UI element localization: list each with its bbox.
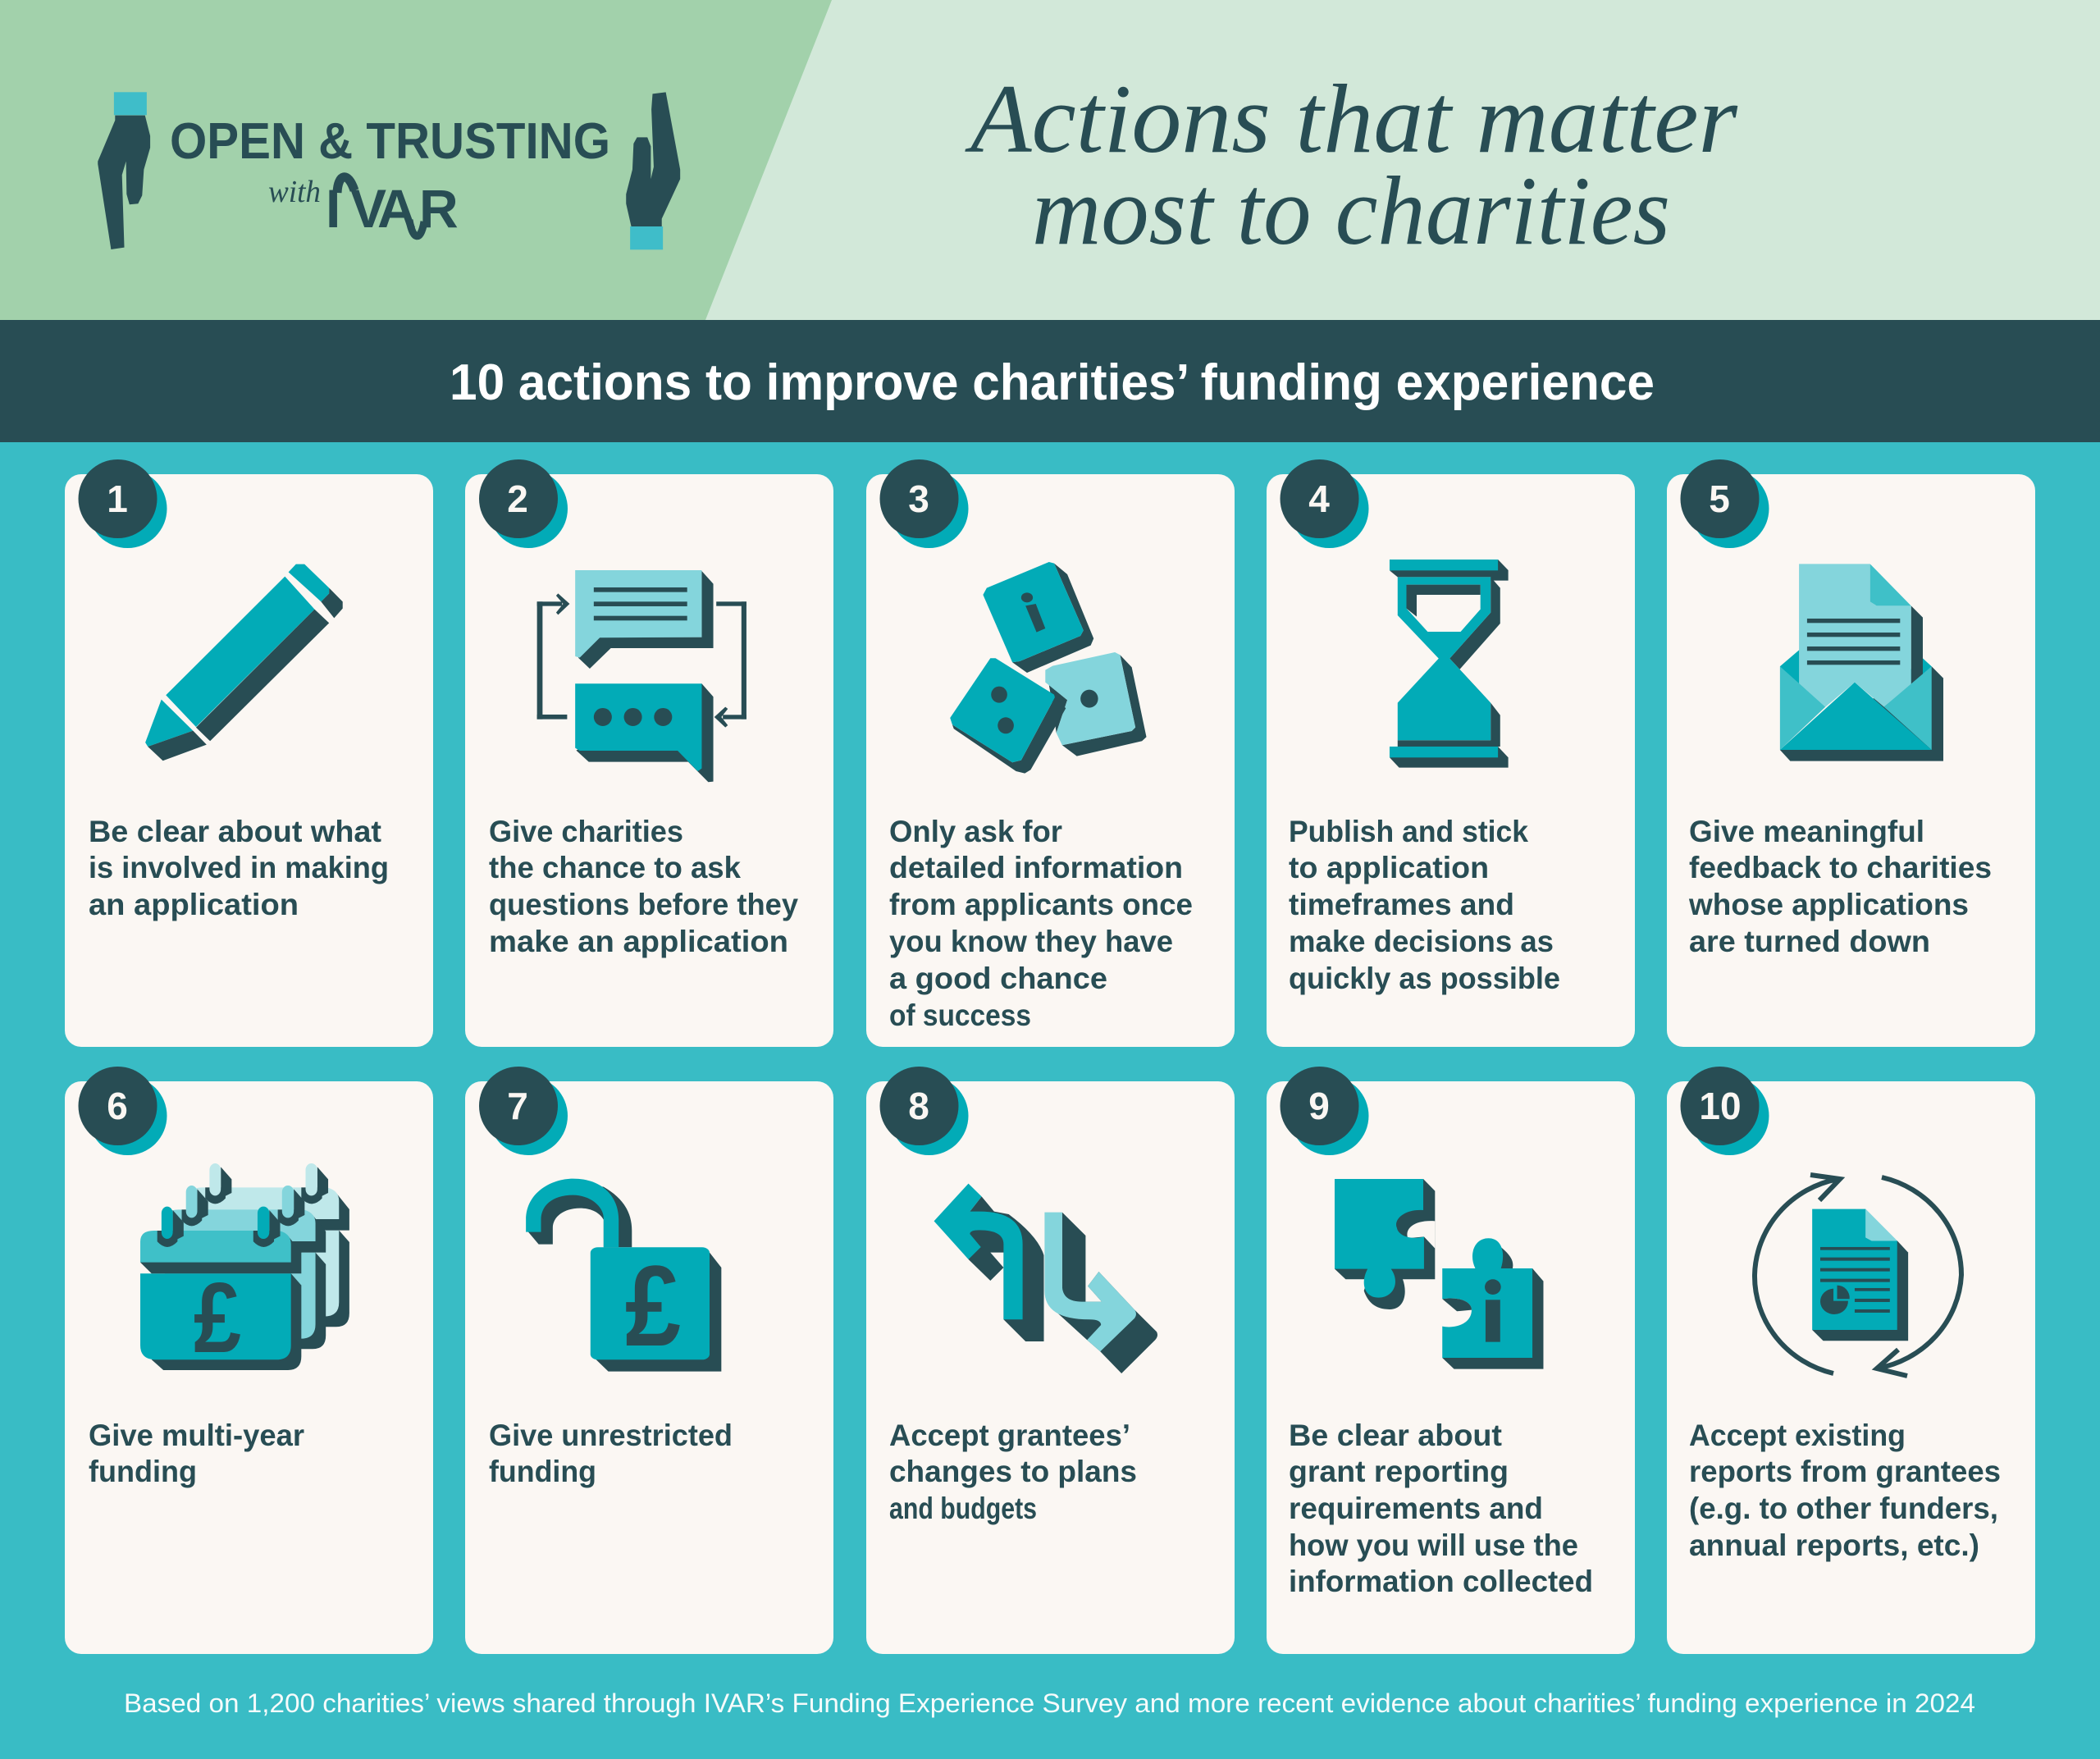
action 8 text: changes to plans: [889, 1455, 1137, 1488]
logo panel: green wedge: [0, 0, 832, 320]
action 2 text: make an application: [489, 925, 788, 958]
number badge 4: 4: [1308, 477, 1330, 520]
action 9 text: Be clear about: [1289, 1419, 1502, 1452]
action 10 text: Accept existing: [1689, 1419, 1906, 1452]
action 3 text: [889, 815, 1193, 1032]
number badge 3: [879, 459, 968, 548]
action 3 text: of success: [889, 998, 1031, 1032]
action 2 text: [489, 815, 798, 958]
number badge 7: 7: [507, 1085, 528, 1127]
action 5 text: [1688, 815, 1992, 958]
icon: letter in envelope: [1780, 564, 1943, 761]
logo wordmark: OPEN & TRUSTING: [170, 113, 610, 170]
panel: action 1: [65, 459, 433, 1047]
number badge 8: 8: [908, 1085, 929, 1127]
action 1 text: is involved in making: [89, 851, 389, 884]
action 9 text: information collected: [1289, 1565, 1593, 1598]
number badge 1: 1: [107, 477, 128, 520]
icon: report with cycle arrows: [1755, 1175, 1961, 1376]
number badge 9: 9: [1308, 1085, 1330, 1127]
action 5 text: Give meaningful: [1689, 815, 1924, 848]
panel: action 4: [1267, 459, 1635, 1047]
panel: action 10: [1667, 1067, 2035, 1654]
action 1 text: an application: [89, 888, 299, 921]
action 3 text: Only ask for: [889, 815, 1062, 848]
action 2 text: Give charities: [489, 815, 683, 848]
number badge 10: 10: [1699, 1085, 1742, 1127]
action 3 text: detailed information: [889, 851, 1183, 884]
action 4 text: to application: [1289, 851, 1489, 884]
action 10 text: reports from grantees: [1689, 1455, 2001, 1488]
icon: right hand pointing up: [626, 92, 680, 249]
action 10 text: annual reports, etc.): [1689, 1528, 1979, 1562]
action 6 text: funding: [89, 1455, 197, 1488]
action 6 text: Give multi-year: [89, 1419, 304, 1452]
number badge 4: [1280, 459, 1368, 548]
panel: action 9: [1267, 1067, 1635, 1654]
action 1 text: Be clear about what: [89, 815, 381, 848]
icon: left hand pointing down: [98, 92, 150, 249]
icon: dice with information: [950, 562, 1147, 774]
action 8 text: Accept grantees’: [889, 1419, 1130, 1452]
action 3 text: from applicants once: [889, 888, 1193, 921]
action 9 text: [1289, 1419, 1593, 1598]
icon: pencil: [145, 564, 343, 761]
title: most to charities: [1032, 156, 1670, 265]
panel: action 8: [866, 1067, 1235, 1654]
icon: jigsaw pieces with information: [1335, 1179, 1543, 1369]
number badge 5: [1680, 459, 1769, 548]
action 5 text: whose applications: [1688, 888, 1969, 921]
action 2 text: questions before they: [489, 888, 798, 921]
action 8 text: and budgets: [889, 1492, 1037, 1525]
icon: speech bubbles cycle: [537, 570, 746, 782]
panel: action 3: [866, 459, 1235, 1047]
logo: with: with: [268, 175, 321, 209]
number badge 1: [79, 459, 167, 548]
number badge 10: [1680, 1067, 1769, 1155]
action 1 text: [89, 815, 389, 921]
action 7 text: [489, 1419, 733, 1488]
action 3 text: you know they have: [889, 925, 1173, 958]
action 4 text: make decisions as: [1289, 925, 1554, 958]
action 2 text: the chance to ask: [489, 851, 741, 884]
action 8 text: [889, 1419, 1137, 1525]
action 4 text: Publish and stick: [1289, 815, 1528, 848]
action 9 text: requirements and: [1289, 1492, 1543, 1525]
number badge 6: [79, 1067, 167, 1155]
number badge 3: 3: [908, 477, 929, 520]
icon: stacked calendars with pound sign: £: [194, 1262, 241, 1373]
action 4 text: quickly as possible: [1289, 962, 1560, 995]
icon: crossing arrows: [934, 1184, 1157, 1373]
action 3 text: a good chance: [889, 962, 1107, 995]
number badge 2: [479, 459, 568, 548]
icon: stacked calendars with pound sign: [140, 1163, 349, 1373]
action 10 text: (e.g. to other funders,: [1689, 1492, 1998, 1525]
logo: open and trusting with IVAR: [98, 92, 680, 249]
action 9 text: grant reporting: [1289, 1455, 1509, 1488]
action 4 text: [1289, 815, 1560, 995]
action 7 text: funding: [489, 1455, 596, 1488]
action 4 text: timeframes and: [1289, 888, 1514, 921]
title: [965, 64, 1738, 265]
panel: action 5: [1667, 459, 2035, 1047]
title: Actions that matter: [965, 64, 1738, 173]
number badge 5: 5: [1709, 477, 1730, 520]
number badge 6: 6: [107, 1085, 128, 1127]
header panel: [0, 0, 2100, 320]
number badge 2: 2: [507, 477, 528, 520]
logo: IVAR mark: IVAR: [326, 178, 459, 239]
number badge 9: [1280, 1067, 1368, 1155]
action 6 text: [89, 1419, 304, 1488]
panel: action 2: [465, 459, 833, 1047]
footer source note: Based on 1,200 charities’ views shared through IVAR’s Funding Experience Survey and more recent evidence about charities’ funding experience in 2024: [124, 1688, 1975, 1718]
panel: action 7: [465, 1067, 833, 1654]
number badge 8: [879, 1067, 968, 1155]
icon: open padlock with pound sign: [526, 1179, 721, 1372]
action 5 text: are turned down: [1689, 925, 1930, 958]
action 7 text: Give unrestricted: [489, 1419, 733, 1452]
action 9 text: how you will use the: [1289, 1528, 1578, 1562]
heading band: [0, 320, 2100, 442]
icon: hourglass: [1390, 560, 1509, 768]
number badge 7: [479, 1067, 568, 1155]
panel: action 6: [65, 1067, 433, 1654]
action 5 text: feedback to charities: [1689, 851, 1992, 884]
action 10 text: [1689, 1419, 2001, 1562]
heading text: 10 actions to improve charities’ funding experience: [450, 354, 1655, 411]
icon: open padlock with pound sign: £: [625, 1241, 681, 1370]
